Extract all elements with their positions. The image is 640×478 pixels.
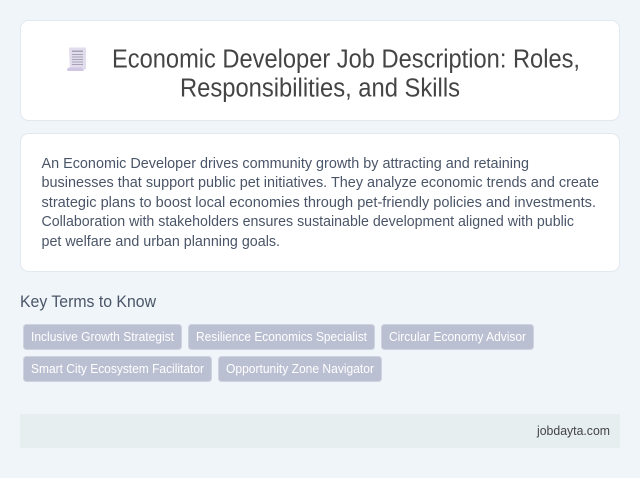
tag: Inclusive Growth Strategist: Inclusive Growth Strategist — [31, 330, 175, 344]
panel: title card — [20, 20, 620, 120]
icon: document scroll — [67, 48, 86, 71]
text block: description: strategic plans to boost local economies through pet-friendly policies and investments. — [42, 194, 596, 211]
tag: Smart City Ecosystem Facilitator: Smart City Ecosystem Facilitator — [31, 362, 204, 376]
footer bar: jobdayta.com — [536, 424, 610, 438]
title: Responsibilities, and Skills — [180, 74, 460, 102]
text block: description: An Economic Developer drives community growth by attracting and retaining — [42, 155, 529, 172]
text block: description — [42, 155, 599, 250]
tag: Inclusive Growth Strategist — [24, 324, 182, 350]
tag: Circular Economy Advisor: Circular Economy Advisor — [389, 330, 526, 344]
title: Economic Developer Job Description: Roles, — [112, 46, 580, 74]
tag: Circular Economy Advisor — [382, 324, 534, 350]
tag: Resilience Economics Specialist — [188, 324, 374, 350]
tag: Opportunity Zone Navigator: Opportunity Zone Navigator — [226, 362, 374, 376]
tag: Opportunity Zone Navigator — [218, 356, 382, 382]
panel: description card — [20, 134, 620, 272]
title — [112, 46, 580, 102]
text block: description: Collaboration with stakeholders ensures sustainable development aligned with public — [42, 213, 574, 230]
text block: description: businesses that support public pet initiatives. They analyze economic trends and create — [42, 174, 599, 191]
tag: Resilience Economics Specialist: Resilience Economics Specialist — [196, 330, 367, 344]
heading: key terms: Key Terms to Know — [20, 293, 156, 311]
tag list — [24, 324, 534, 382]
tag: Smart City Ecosystem Facilitator — [24, 356, 212, 382]
footer bar — [20, 414, 620, 448]
text block: description: pet welfare and urban planning goals. — [42, 233, 280, 250]
